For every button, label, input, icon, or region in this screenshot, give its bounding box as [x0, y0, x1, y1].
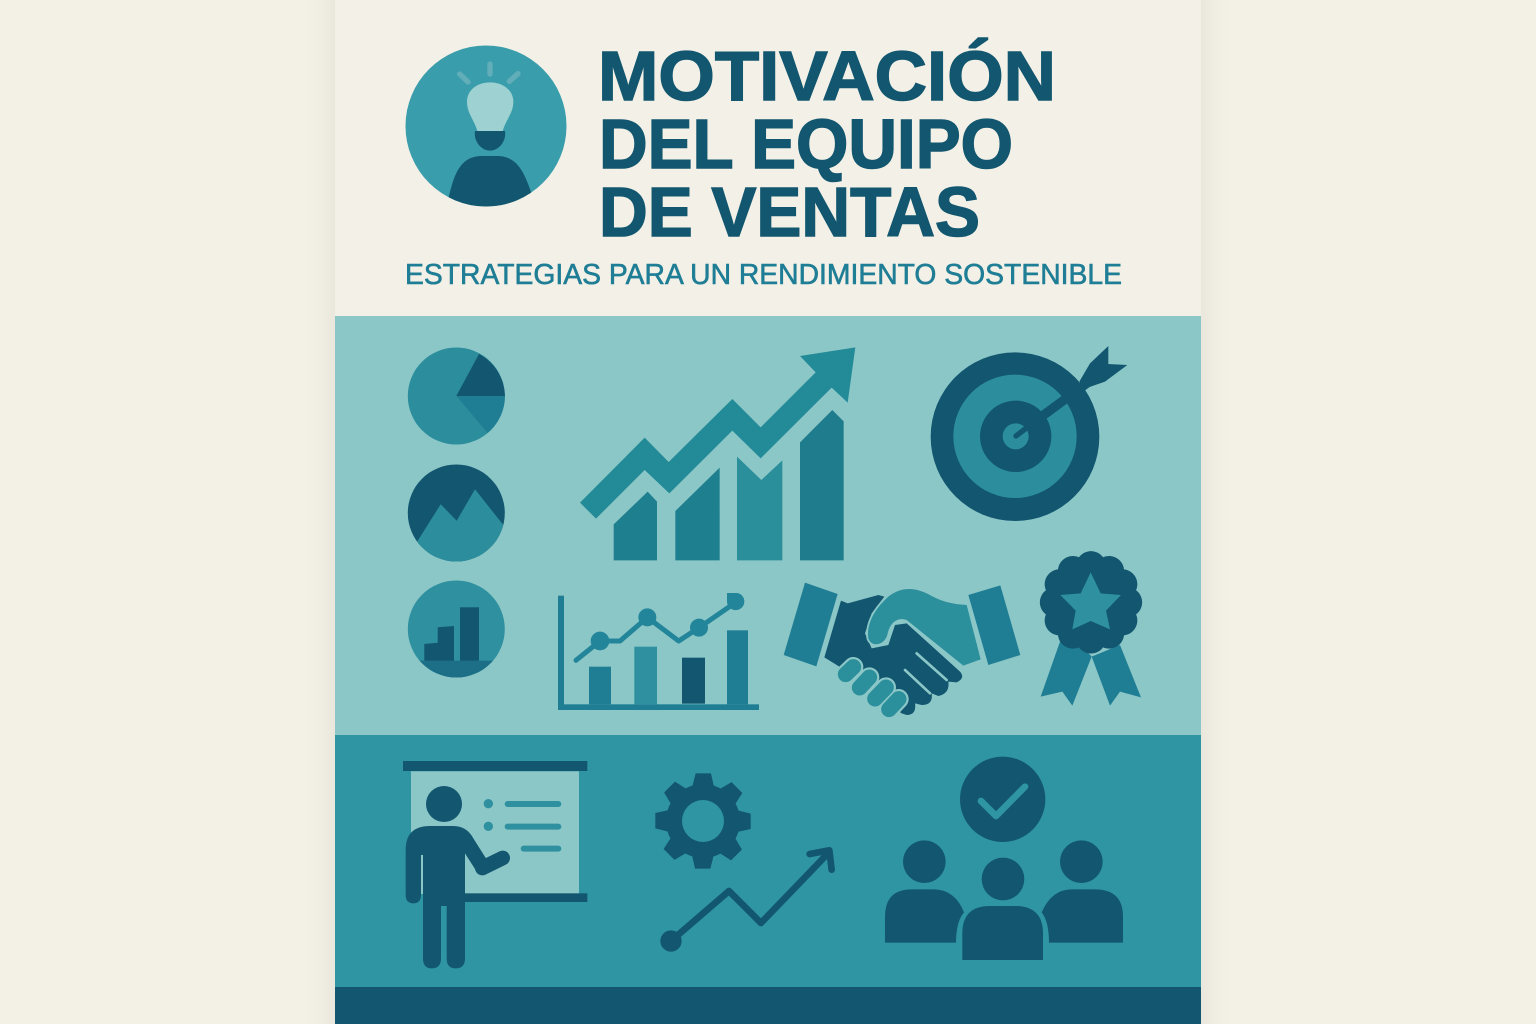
chart: bars and line [558, 593, 759, 710]
icon: team with check mark [885, 757, 1123, 960]
panel: teal icons band [335, 735, 1201, 987]
header panel [405, 37, 1122, 291]
title: DEL EQUIPO [599, 105, 1013, 183]
icon: handshake [784, 583, 1020, 715]
title [598, 37, 1056, 251]
footer band [335, 987, 1201, 1024]
icon: gear [655, 773, 751, 869]
arrow: trend line [660, 850, 832, 952]
title: MOTIVACIÓN [598, 37, 1056, 115]
bars [614, 410, 844, 560]
icon: mountain chart [408, 464, 505, 562]
icon: presenter at board [403, 761, 587, 968]
icon: pie chart [408, 348, 505, 444]
icon: target with dart [931, 346, 1127, 521]
title: DE VENTAS [599, 173, 980, 251]
subtitle: ESTRATEGIAS PARA UN RENDIMIENTO SOSTENIBLE [405, 259, 1122, 291]
icon: circle bar chart [408, 580, 505, 678]
arrow: growth [580, 347, 855, 519]
panel: light icons band [335, 316, 1201, 735]
icon: award ribbon [1040, 551, 1142, 706]
icon: person with light bulb [406, 46, 566, 210]
chart: rising bars with arrow [580, 347, 855, 560]
